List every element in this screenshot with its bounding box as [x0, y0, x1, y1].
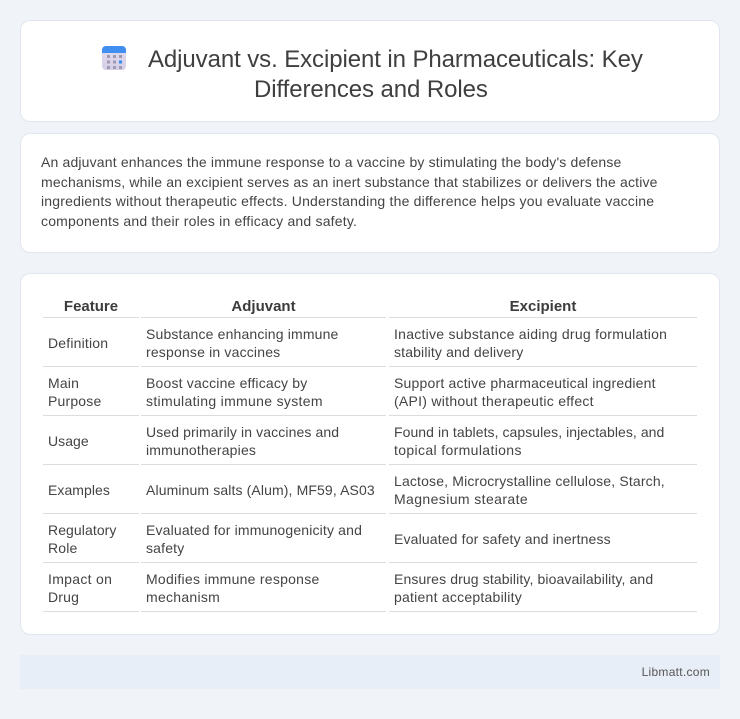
panel: comparison table [20, 273, 720, 635]
row: Usage: Usage [48, 433, 89, 449]
row: Impact on Drug [48, 571, 112, 605]
row: Main Purpose: Main [48, 375, 79, 391]
Usage: adjuvant: immunotherapies [146, 442, 256, 458]
Usage: excipient: Found in tablets, capsules, injectables, and [394, 424, 664, 440]
Main Purpose: excipient: Support active pharmaceutical ingredient [394, 375, 656, 391]
Examples: excipient [394, 473, 665, 507]
header: Excipient: Excipient [510, 298, 576, 315]
Usage: excipient: topical formulations [394, 442, 522, 458]
row: Impact on Drug: Drug [48, 589, 79, 605]
row: Definition: Definition [48, 335, 108, 351]
Definition: adjuvant: response in vaccines [146, 344, 280, 360]
row: Regulatory Role: Regulatory [48, 522, 117, 538]
intro text: An adjuvant enhances the immune response to a vaccine by stimulating the body's defense [41, 154, 622, 170]
Main Purpose: excipient: (API) without therapeutic effect [394, 393, 594, 409]
Impact on Drug: adjuvant: mechanism [146, 589, 220, 605]
header: Adjuvant: Adjuvant [231, 298, 296, 315]
Impact on Drug: excipient: Ensures drug stability, bioavailability, and [394, 571, 653, 587]
row: Regulatory Role [48, 522, 117, 556]
Usage: adjuvant: Used primarily in vaccines and [146, 424, 339, 440]
Examples: excipient: Lactose, Microcrystalline cellulose, Starch, [394, 473, 665, 489]
Main Purpose: excipient [394, 375, 656, 409]
Main Purpose: adjuvant: stimulating immune system [146, 393, 323, 409]
Examples: adjuvant: Aluminum salts (Alum), MF59, AS03 [146, 482, 375, 498]
Regulatory Role: adjuvant [146, 522, 362, 556]
header: Feature: Feature [64, 298, 118, 315]
row: Main Purpose [48, 375, 101, 409]
Definition: excipient: Inactive substance aiding drug formulation [394, 326, 667, 342]
footer text: Libmatt.com: Libmatt.com [642, 665, 710, 679]
row: Regulatory Role: Role [48, 540, 78, 556]
Main Purpose: adjuvant [146, 375, 323, 409]
Regulatory Role: adjuvant: safety [146, 540, 184, 556]
row: Impact on Drug: Impact on [48, 571, 112, 587]
Impact on Drug: adjuvant [146, 571, 320, 605]
Main Purpose: adjuvant: Boost vaccine efficacy by [146, 375, 307, 391]
title [148, 46, 643, 103]
Regulatory Role: adjuvant: Evaluated for immunogenicity and [146, 522, 362, 538]
intro text [41, 154, 658, 229]
Definition: excipient [394, 326, 667, 360]
title: Differences and Roles [254, 76, 488, 103]
Definition: excipient: stability and delivery [394, 344, 523, 360]
icon: calendar [102, 46, 126, 70]
panel: title card [20, 20, 720, 122]
title: Adjuvant vs. Excipient in Pharmaceuticals: Key [148, 46, 643, 73]
Usage: excipient [394, 424, 664, 458]
intro text: ingredients without therapeutic effects. Understanding the difference helps you evaluate vaccine [41, 193, 654, 209]
Usage: adjuvant [146, 424, 339, 458]
footer bar [20, 655, 720, 689]
intro text: mechanisms, while an excipient serves as an inert substance that stabilizes or delivers the active [41, 174, 658, 190]
intro text: components and their roles in efficacy and safety. [41, 213, 357, 229]
row: Examples: Examples [48, 482, 110, 498]
Definition: adjuvant: Substance enhancing immune [146, 326, 339, 342]
row: Main Purpose: Purpose [48, 393, 101, 409]
Impact on Drug: adjuvant: Modifies immune response [146, 571, 320, 587]
Examples: excipient: Magnesium stearate [394, 491, 528, 507]
panel: introduction [20, 133, 720, 253]
Impact on Drug: excipient: patient acceptability [394, 589, 522, 605]
Definition: adjuvant [146, 326, 339, 360]
Impact on Drug: excipient [394, 571, 653, 605]
Regulatory Role: excipient: Evaluated for safety and inertness [394, 531, 611, 547]
